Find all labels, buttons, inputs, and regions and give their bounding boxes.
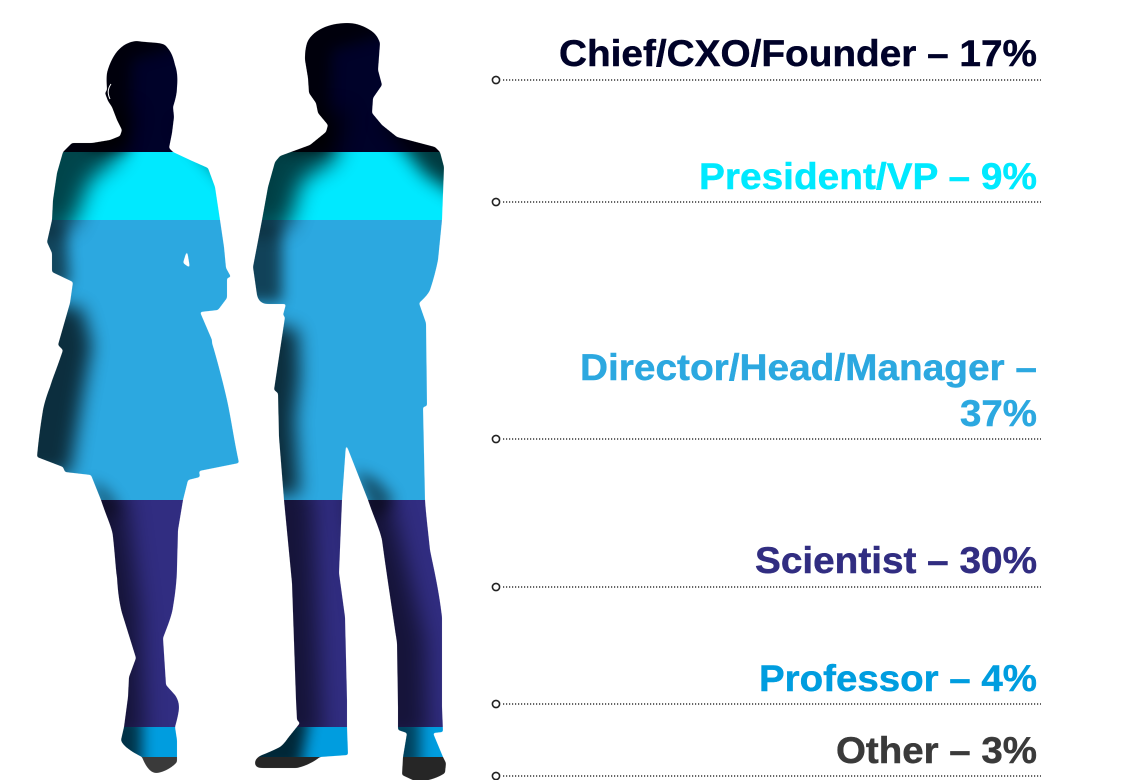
- band: President/VP: [262, 152, 444, 220]
- band: Other: [142, 757, 178, 773]
- label: Other 3%: Other – 3%: [836, 730, 1037, 771]
- band: Chief/CXO/Founder: [63, 41, 178, 152]
- label: Scientist 30%: [492, 540, 1041, 591]
- label: Chief/CXO/Founder 17%: [492, 33, 1041, 84]
- band: Professor: [258, 727, 443, 757]
- band: Director/Head/Manager: [37, 220, 239, 500]
- label: Scientist 30%: Scientist – 30%: [755, 540, 1037, 581]
- band: Director/Head/Manager: [253, 220, 442, 500]
- label: President/VP 9%: President/VP – 9%: [699, 156, 1037, 197]
- label: Director/Head/Manager 37%: Director/Head/Manager –: [580, 347, 1037, 388]
- label: President/VP 9%: [492, 156, 1041, 206]
- band: Professor: [121, 727, 178, 757]
- label: Professor 4%: Professor – 4%: [759, 658, 1037, 699]
- icon: woman glasses highlight: [108, 84, 111, 99]
- shading: woman: [37, 41, 215, 757]
- label: Director/Head/Manager 37%: [492, 347, 1041, 443]
- band: Scientist: [101, 500, 184, 727]
- band: Scientist: [284, 500, 443, 727]
- band: Other: [255, 757, 446, 780]
- label: Chief/CXO/Founder 17%: Chief/CXO/Founder – 17%: [559, 33, 1037, 74]
- figure: man silhouette: [253, 23, 446, 780]
- figure: woman silhouette: [37, 41, 239, 773]
- label: Other 3%: [492, 730, 1041, 780]
- shading: man: [253, 23, 444, 757]
- band: Chief/CXO/Founder: [291, 23, 440, 152]
- band: President/VP: [52, 152, 220, 220]
- label: Director/Head/Manager 37%: 37%: [960, 393, 1037, 434]
- label: Professor 4%: [492, 658, 1041, 708]
